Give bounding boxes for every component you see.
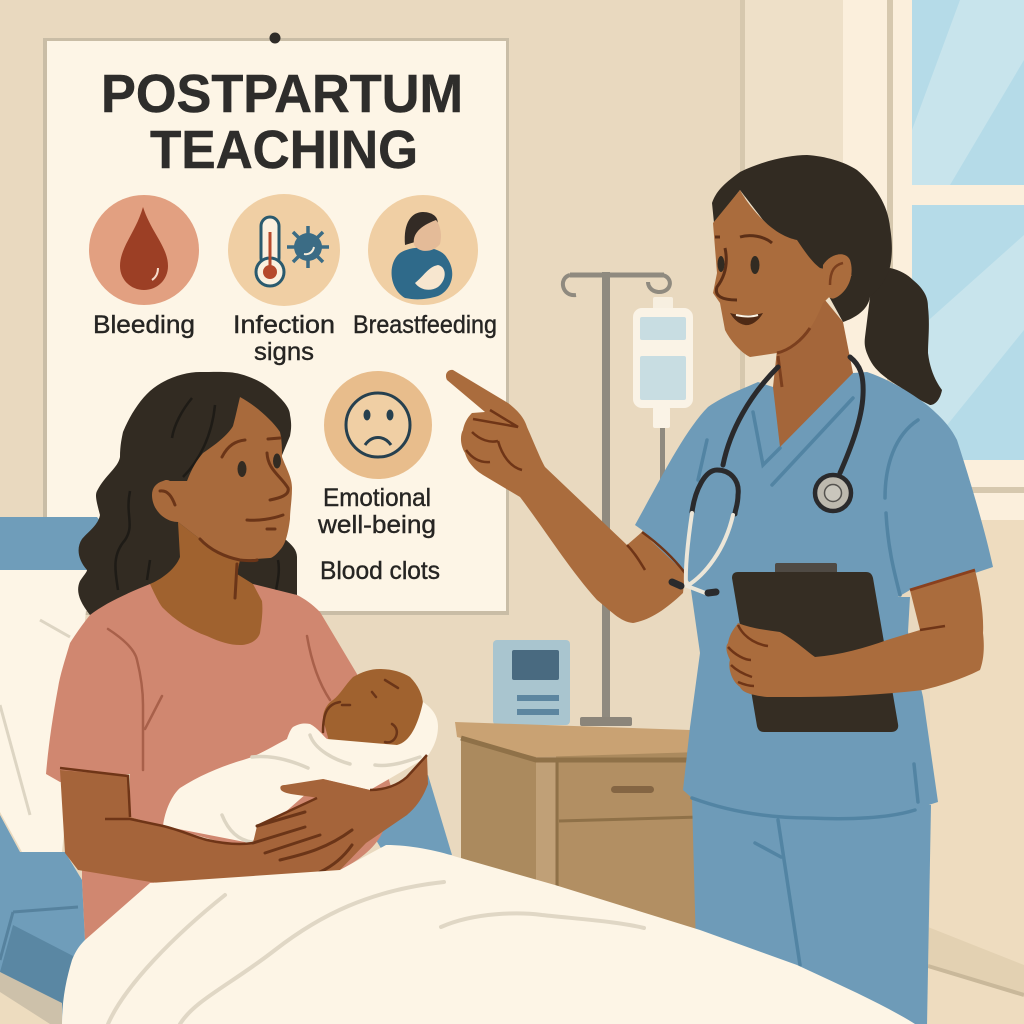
label: emotional well-being: well-being	[317, 511, 436, 539]
label: infection signs	[233, 311, 335, 366]
IV pole and bag	[563, 272, 693, 726]
label: breastfeeding: Breastfeeding	[353, 311, 497, 339]
label: infection signs: Infection	[233, 311, 335, 339]
nurse hair	[712, 155, 892, 322]
mother	[46, 372, 438, 940]
label: emotional well-being	[317, 484, 436, 539]
nurse face	[713, 190, 852, 357]
nurse pointing arm	[446, 370, 685, 623]
icon: emotional sad face	[324, 371, 432, 479]
bed blanket	[62, 845, 915, 1024]
label: blood clots: Blood clots	[320, 557, 440, 585]
nurse neck	[773, 300, 853, 447]
bed headboard and pillow	[0, 517, 452, 1024]
mother shirt	[46, 584, 392, 870]
nightstand	[455, 722, 700, 940]
mother arm and hand	[60, 755, 428, 883]
nurse ponytail	[865, 268, 942, 405]
baby head	[323, 669, 423, 748]
poster	[43, 32, 509, 615]
mother hair	[78, 372, 297, 615]
icon: infection thermometer and germ	[228, 194, 340, 306]
nurse far arm and hand	[726, 570, 984, 697]
bedside monitor	[493, 640, 570, 725]
icon: bleeding blood drop	[89, 195, 199, 305]
mother face	[163, 397, 292, 560]
poster title	[101, 64, 463, 180]
mother ear	[152, 480, 180, 522]
label: emotional well-being: Emotional	[323, 484, 431, 512]
window	[843, 0, 1024, 520]
poster title: TEACHING	[150, 120, 418, 180]
label: bleeding: Bleeding	[93, 311, 195, 339]
nurse	[446, 155, 993, 1024]
icon: breastfeeding	[368, 195, 478, 305]
poster title: POSTPARTUM	[101, 64, 463, 124]
mother neck	[150, 522, 262, 645]
label: infection signs: signs	[254, 338, 314, 366]
clipboard	[732, 563, 898, 732]
stethoscope	[672, 357, 863, 594]
baby swaddle blanket	[163, 702, 438, 843]
nurse scrub top	[635, 372, 993, 819]
nurse ear	[823, 254, 852, 299]
nurse scrub pants	[692, 798, 931, 1024]
